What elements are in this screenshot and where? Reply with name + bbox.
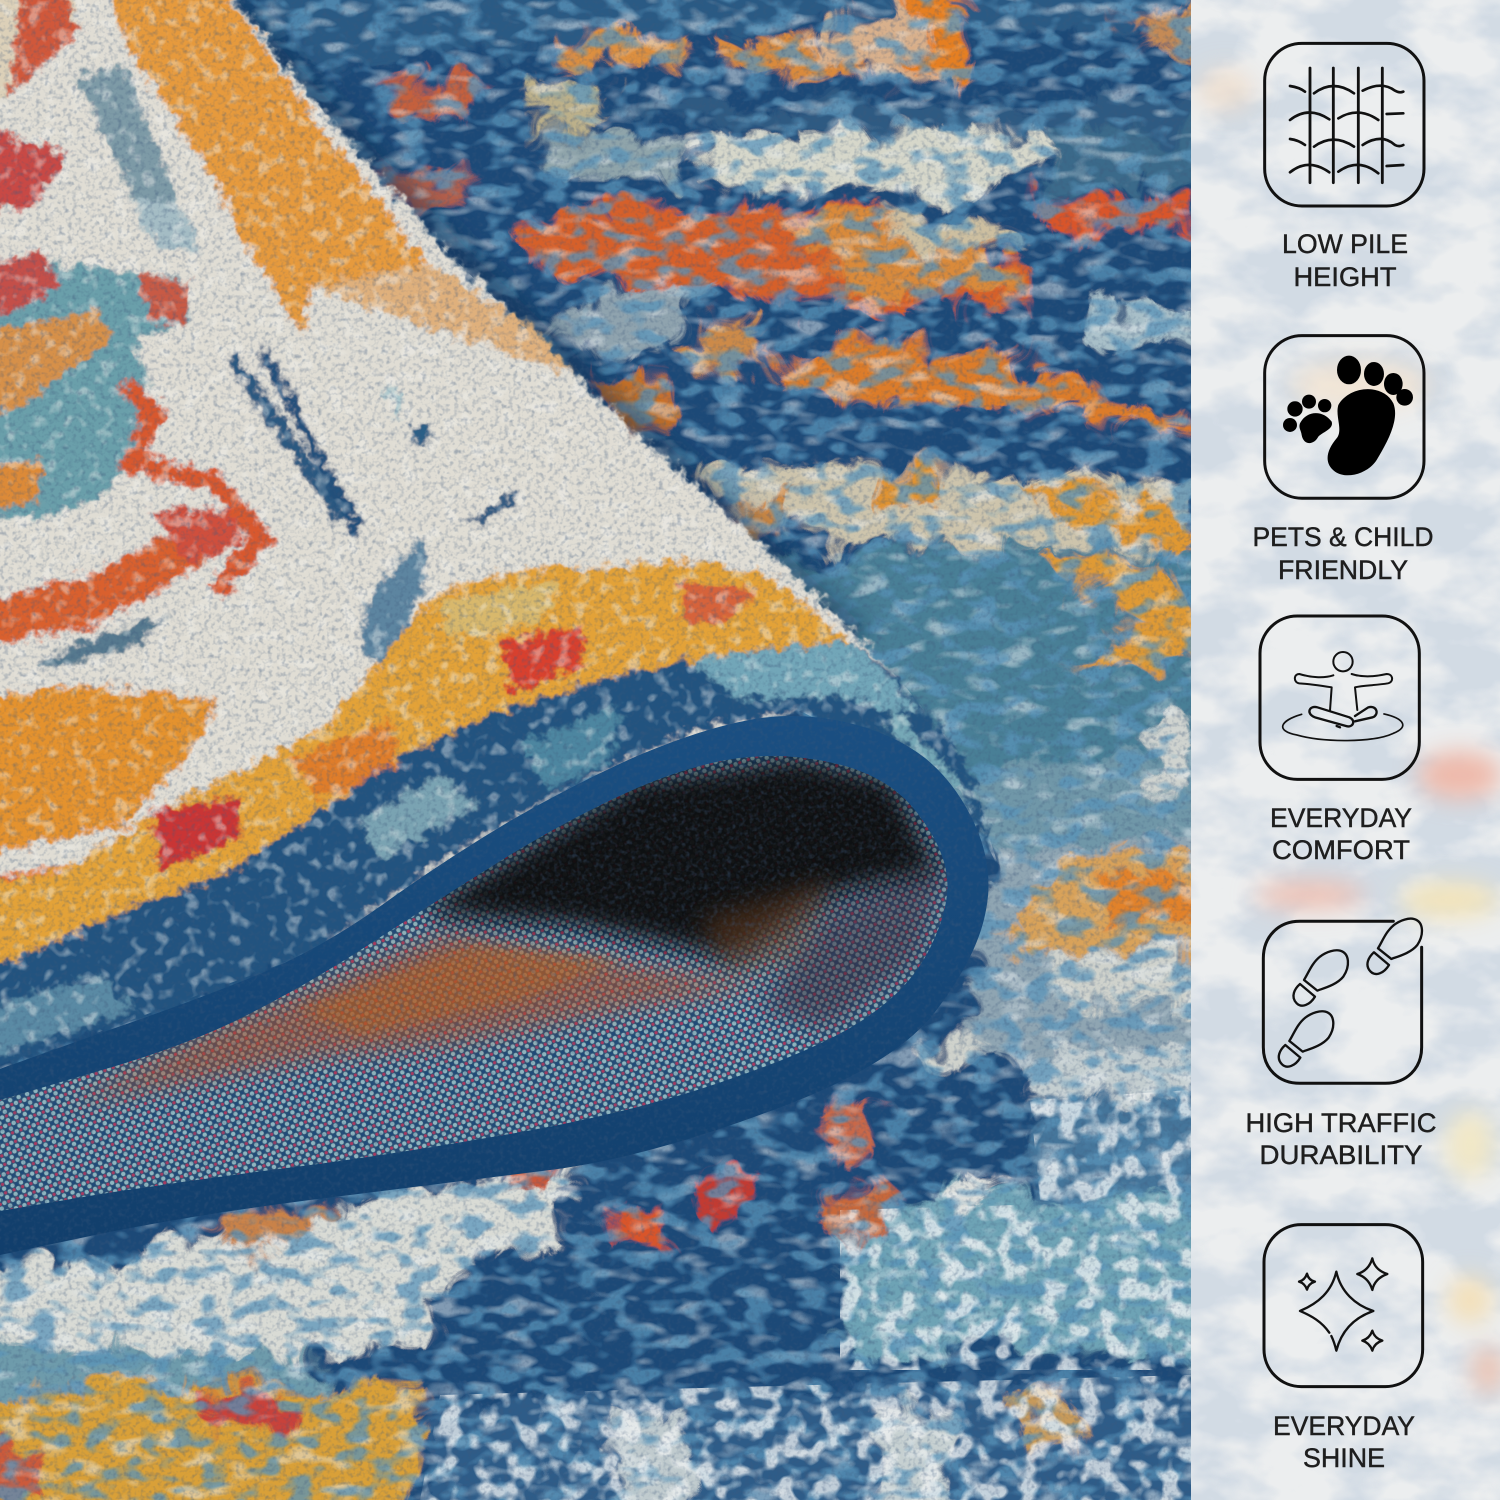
label: SHINE [1303,1443,1385,1473]
label: EVERYDAY [1273,1411,1415,1441]
icon: woven pile [1265,43,1424,206]
medallion motifs [0,264,192,520]
binding piping [0,716,988,1255]
icon: meditating figure [1260,616,1419,779]
right feature column background [1191,0,1500,1500]
upper motifs [567,36,687,67]
feature: low pile height [1265,43,1424,292]
feature: everyday shine [1264,1225,1423,1473]
icon: sparkles [1264,1225,1423,1387]
feature: pets and child friendly [1252,336,1434,585]
top border band [95,0,428,335]
fold border orange band [0,560,850,990]
feature: high traffic durability [1246,919,1436,1170]
left corner red [0,0,80,110]
grain overlay [0,0,1191,1500]
lower floor [435,1375,1260,1500]
icon: paw and foot [1265,336,1424,498]
label: LOW PILE [1282,229,1408,259]
label: PETS & CHILD [1252,522,1434,552]
folded rug top face [0,0,1002,1069]
label: FRIENDLY [1278,555,1408,585]
fold border blue band [0,640,1000,1085]
navy stripes [232,358,345,520]
label: COMFORT [1272,835,1410,865]
underside woven backing [0,740,960,1220]
feature: everyday comfort [1260,616,1419,865]
icon: footsteps [1263,919,1422,1083]
label: HEIGHT [1294,262,1396,292]
label: EVERYDAY [1270,803,1412,833]
rug shadow on floor [215,0,860,640]
label: DURABILITY [1260,1140,1422,1170]
label: HIGH TRAFFIC [1246,1108,1436,1138]
